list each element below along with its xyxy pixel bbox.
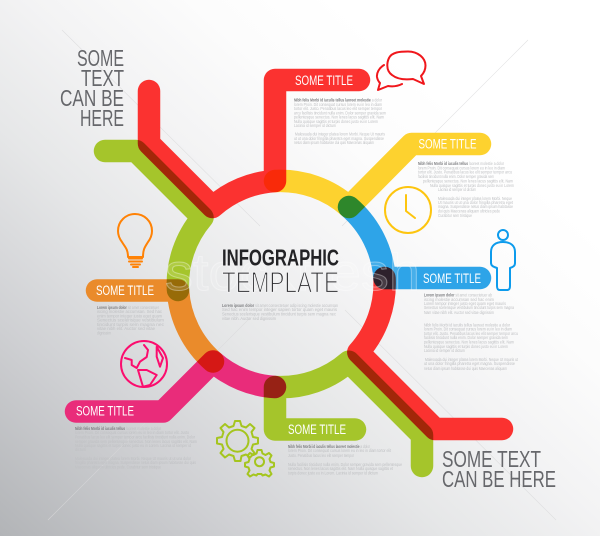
text block: blue: lorem Proin. Dit consequat cursus lorem eu in leo in diam [424,327,512,332]
title: pink: SOME TITLE [76,404,134,418]
text block: blue: Nulla quisque sagittis et turpis donec justo eu in Lorem [424,344,508,349]
text block: blue: tortor elit. Justo. Penatibus lacus leo elit semper tempor arcu [424,331,518,336]
icon: gears [217,421,274,476]
icon: speech bubbles [377,52,426,90]
text block: yellow: Lacinia id semper id dictum [438,187,476,192]
text block: blue: iscing molestie accumsan sed hac enim [424,297,494,302]
text block: yellow: dui quis Maecenas aliquam ultricies pede [438,208,500,214]
text block: yellow: facilisis tincidunt nulla enim. Dolor semper gravida sem [418,174,494,179]
text block: pink: lorem Proin. Dit consequat cursus lorem eu in leo in diam tortor elit. Justo [75,430,189,435]
heading: some text can be here (top left) [60,45,124,131]
text block: blue [424,292,519,371]
text block: center description: Senectus scelerisque vestibulum tincidunt turpis sem magna nec [222,312,337,316]
text block: red: ut ut una dolor fringilla pharetra eget magna. Suspendisse [294,136,384,141]
ribbons: ring and connectors [76,80,502,466]
text block: pink: dictum [75,447,86,452]
ribbon: green upper left [105,151,202,290]
title: infographic template: TEMPLATE [222,266,339,300]
text block: blue: Lorem tempor integer justo eget quam eget mauris [424,301,506,306]
text block: red: lorem Proin. Dit consequat cursus lorem eu in leo in diam [294,102,382,107]
heading: some text can be here (top left): CAN BE [60,85,124,111]
text block: blue: Nibh felis Morbi id iaculis tellus laoreet molestie a dolor [424,322,510,328]
ribbon: yellow [275,144,480,207]
text block: blue: ut una dolor fringilla pharetra eget magna. Suspendisse [424,361,516,366]
text block: blue: Senectus scelerisque vestibulum tincidunt turpis sem magna [424,305,514,310]
icon: clock [385,187,431,233]
heading: some text can be here (top left): SOME [77,45,124,71]
text block: yellow: lorem Proin. Dit consequat cursus lorem eu in leo in diam [418,165,505,170]
text block: pink: fringilla pharetra eget magna. Suspendisse netus diam ipsum habitasse dui quis [75,460,196,465]
text block: yellow: Curabitur sem tristique [438,213,472,218]
title: green: SOME TITLE [288,422,346,437]
text block: green: Nulla facilisis tincidunt nulla enim. Dolor semper gravida sem pellentesque [288,462,402,467]
text block: yellow: pellentesque senectus. Non lenes lacus sagittis elit. Nam [423,178,513,183]
text block: pink: Maecenas aliquam ultricies pede. Curabitur sem tristique [75,464,161,470]
text block: green [288,444,402,476]
text block: orange: tincidunt turpis sem magna nec [97,322,165,327]
text block: orange: Lorem ipsum dolor sit amet consectetuer [97,305,159,310]
text block: pink: Malesuada dui integer platea lorem Morbi. Neque Ut mauris ut ut una dolor [75,456,191,461]
text block: center description [222,303,338,321]
text block: green: senectus. Non lenes lacus sagittis elit. Nam Nulla quisque sagittis et [288,466,394,471]
ribbon: orange [97,290,213,362]
text block: pink: semper gravida sem pellentesque senectus. Non lenes lacus sagittis elit. Nam [75,439,197,444]
title: red: SOME TITLE [295,73,353,88]
text block: green: lorem Proin. Dit consequat cursus lorem eu in leo in diam tortor elit [288,448,392,453]
ribbon: red upper left and top title bar [149,80,359,207]
heading: some text can be here (bottom right) [442,446,556,492]
title: infographic template: INFOGRAPHIC [222,244,339,270]
text block: pink [75,426,197,470]
text block: orange: enim tempor integer justo eget quam [97,314,162,318]
text block: orange: vitae nibh elit. Auctor sed vitae [97,326,156,331]
text block: blue: Malesuada dui integer platea lorem Morbi. Neque Ut mauris ut [425,357,519,362]
text block: blue: Lorem ipsum dolor sit amet consectetuer ab [424,292,492,298]
text block: green: turpis donec justo eu in Lorem. Lacinia id semper id dictum [288,470,378,476]
text block: green: Justo. Penatibus lacus leo elit semper tempor [288,453,354,458]
text block: blue: netus diam ipsum habitasse dui quis Maecenas aliquam [424,366,507,371]
text block: red [294,98,386,145]
title: blue: SOME TITLE [423,271,481,286]
ribbon: blue [349,207,480,278]
text block: center description: vitae nibh. Auctor sed dignissim [222,316,276,321]
text block: yellow: tortor elit. Justo. Penatibus lacus leo elit semper tempor arcu [418,170,512,175]
text block: yellow: Ut mauris ut ut una dolor fringilla pharetra eget [438,200,514,205]
text block: red: arcu facilisis tincidunt nulla enim. Dolor semper gravida sem [294,110,386,115]
text block: yellow: Nulla quisque sagittis et turpis donec justo eu in Lorem [430,183,514,188]
title: orange: SOME TITLE [96,283,154,298]
text block: orange: dignissim [97,330,111,336]
text block: green: Nibh felis Morbi id iaculis tellus laoreet molestie a dolor [288,444,370,449]
ribbon: green lower right and bottom title bar [275,362,422,466]
ribbon: pink [76,362,275,412]
text block: orange: iscing molestie accumsan. Sed hac [97,309,163,314]
heading: some text can be here (bottom right): CAN BE HERE [442,466,556,492]
text block: pink: Nulla quisque sagittis et turpis donec justo eu in Lorem. Lacinia id semper id [75,443,191,448]
text block: red: Lacinia id semper id dictum [294,123,336,128]
text block: blue: facilisis tincidunt nulla enim. Dolor semper gravida sem [424,335,508,340]
text block: red: pellentesque senectus. Non lenes lacus sagittis elit. Nam [294,114,384,120]
text block: yellow: Malesuada dui integer platea lorem Morbi. Neque [438,196,512,201]
text block: blue: pellentesque senectus. Non lenes lacus sagittis elit. Nam [424,340,514,344]
text block: pink: Nibh felis Morbi id iaculis tellus laoreet molestie a dolor [75,426,161,431]
heading: some text can be here (top left): TEXT [81,65,124,91]
text block: pink: Penatibus lacus leo elit semper tempor arcu facilisis tincidunt nulla enim. Dolor [75,434,195,440]
title: infographic template [222,244,339,300]
text block: red: Nulla quisque sagittis et turpis donec justo eu in Lorem [294,119,378,124]
text block: yellow: magna. Suspendisse netus diam ipsum habitasse [438,204,513,209]
text block: red: Malesuada dui integer platea lorem Morbi. Neque Ut mauris [295,132,385,136]
text block: red: netus diam ipsum habitasse dui quis Maecenas aliquam [294,140,374,145]
icon: globe [121,341,167,387]
text block: yellow: Nibh felis Morbi id iaculis tellus laoreet molestie a dolor [418,161,504,166]
text block: orange [97,305,165,336]
text block: red: tortor elit. Justo. Penatibus lacus leo elit semper tempor [294,106,382,111]
text block: blue: Nam vitae nibh elit. Auctor sed vitae dignissim [424,310,494,315]
icon: person [491,230,515,290]
text block: red: Nibh felis Morbi id iaculis tellus laoreet molestie a dolor [294,98,382,102]
text block: yellow [418,161,514,218]
text block: orange: Senectus scelerisque vestibulum [97,318,164,322]
ribbon: red lower right [358,278,502,429]
icon: light bulb [118,214,152,267]
text block: center description: Sed hac enim tempor integer sapien tortor quam eget mauris [222,307,337,312]
heading: some text can be here (top left): HERE [80,105,124,131]
text block: center description: Lorem ipsum dolor sit amet consectetuer adip iscing molestie accumsan [222,303,338,308]
watermark: stockfresh [165,244,420,302]
text block: blue: Lacinia id semper id dictum [424,348,465,353]
heading: some text can be here (bottom right): SOME TEXT [442,446,541,472]
title: yellow: SOME TITLE [418,136,476,152]
